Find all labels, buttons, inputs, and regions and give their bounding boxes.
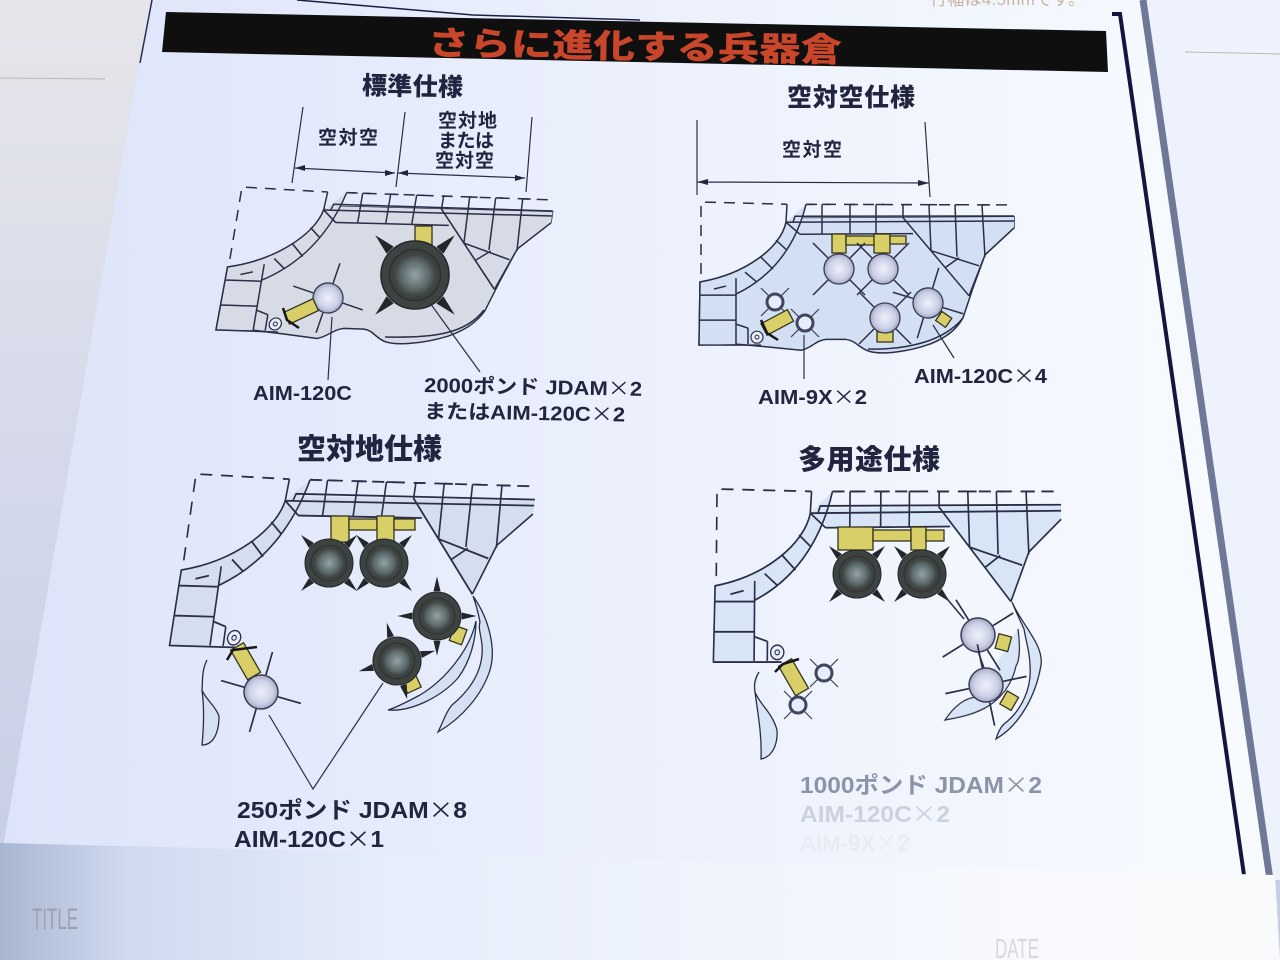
label: 1000ポンド JDAM ×2 <box>800 766 1042 800</box>
AIM-120C x2 <box>943 594 1027 726</box>
AIM-9X x2 <box>761 288 819 337</box>
label: AIM-120C <box>253 383 352 405</box>
brackets <box>331 516 467 693</box>
heading: air to ground: 空対地仕様 <box>297 433 442 466</box>
panel: air to ground configuration <box>170 433 537 854</box>
heading: multi-role: 多用途仕様 <box>798 444 940 475</box>
callout lines <box>269 683 383 789</box>
heading: air to air: 空対空仕様 <box>787 84 915 112</box>
AIM-9X x2 <box>784 659 838 719</box>
dimension label group: 空対地 <box>438 110 497 132</box>
title: さらに進化する兵器倉 <box>428 24 842 69</box>
gray binding line <box>1143 0 1270 880</box>
page edge top <box>297 0 640 20</box>
dimension label: 空対空 <box>782 139 842 161</box>
panel: air to air configuration <box>697 84 1048 410</box>
label: またはAIM-120C ×2 <box>424 395 625 428</box>
label: AIM-120C ×1 <box>234 820 384 854</box>
launcher <box>779 659 809 696</box>
right fragments <box>996 602 1041 739</box>
dimension label group: または <box>438 130 494 152</box>
right margin rule <box>1185 52 1280 54</box>
1000 lb JDAM x2 <box>829 546 950 602</box>
launcher <box>231 643 261 680</box>
aircraft diagram multi-role <box>713 489 1061 759</box>
label: 2000ポンド JDAM ×2 <box>424 369 642 402</box>
brackets <box>832 234 952 342</box>
JDAM <box>375 235 455 315</box>
left fragment <box>202 660 219 745</box>
aircraft diagram air to ground <box>170 474 537 745</box>
aircraft diagram air to air <box>699 202 1014 353</box>
label: 250ポンド JDAM ×8 <box>237 791 467 825</box>
panel: multi-role configuration <box>713 444 1061 858</box>
label nearly erased: AIM-9X×2 <box>800 824 910 858</box>
callout lines <box>804 325 954 379</box>
bottom paper sheet <box>0 843 1280 960</box>
page edge left <box>140 0 152 63</box>
left fragment <box>754 672 777 759</box>
label faded: AIM-120C ×2 <box>800 795 950 829</box>
heading: standard: 標準仕様 <box>362 72 463 102</box>
bottom paper title mark: TITLE <box>32 903 78 936</box>
dimension lines <box>292 107 532 192</box>
AIM-120C x4 <box>813 243 963 344</box>
brackets <box>838 527 1019 710</box>
launcher <box>761 310 794 335</box>
panel: standard configuration <box>215 72 642 428</box>
right fragments <box>388 621 476 710</box>
dimension label group: 空対空 <box>435 150 494 172</box>
label: AIM-120C ×4 <box>914 360 1048 389</box>
AIM-120C <box>293 263 363 333</box>
launcher <box>284 299 318 324</box>
label: AIM-9X ×2 <box>758 381 867 410</box>
aircraft diagram standard <box>215 187 555 348</box>
title banner <box>162 12 1108 72</box>
AIM-120C <box>221 652 301 732</box>
black binding line <box>1112 14 1244 875</box>
bracket <box>415 226 432 247</box>
callout lines <box>328 303 480 380</box>
dimension lines <box>697 120 930 197</box>
dimension label: 空対空 <box>318 127 378 149</box>
background: right page <box>1143 0 1280 880</box>
left margin rule <box>0 78 105 79</box>
250 lb JDAM x8 <box>301 535 477 699</box>
dimension label group <box>435 110 497 172</box>
